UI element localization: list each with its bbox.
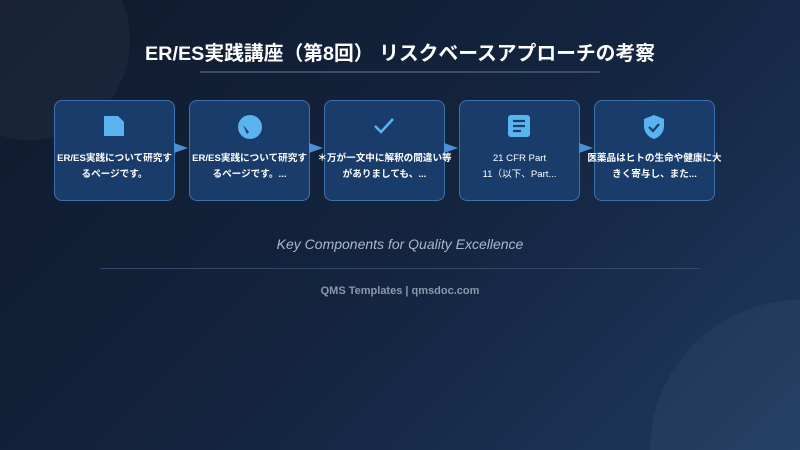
arrow 4 — [579, 143, 593, 153]
card 4 — [459, 100, 580, 201]
arrow 2 — [309, 143, 323, 153]
card 5: 医薬品はヒトの生命や健康に大 — [587, 153, 722, 164]
icon: shield — [644, 115, 664, 139]
card 1: るページです。 — [81, 169, 148, 180]
card 3: ＊万が一文中に解釈の間違い等 — [317, 153, 452, 164]
card 2: るページです。... — [212, 169, 286, 180]
icon: document — [104, 116, 124, 136]
card 1: ER/ES実践について研究す — [57, 153, 172, 164]
card 4: 21 CFR Part — [493, 153, 546, 164]
arrow 1 — [174, 143, 188, 153]
card 3 — [324, 100, 445, 201]
card 1 — [54, 100, 175, 201]
title: ER/ES実践講座（第8回） リスクベースアプローチの考察 — [145, 43, 655, 65]
icon: globe — [238, 115, 262, 139]
card 5 — [594, 100, 715, 201]
icon: list — [508, 115, 530, 137]
card 5: きく寄与し、また... — [612, 169, 697, 180]
card 3: がありましても、... — [343, 169, 426, 180]
card 2 — [189, 100, 310, 201]
card 2: ER/ES実践について研究す — [192, 153, 307, 164]
card 4: 11（以下、Part... — [483, 169, 556, 180]
footer: QMS Templates | qmsdoc.com — [321, 285, 479, 297]
icon: check — [374, 118, 394, 134]
arrow 3 — [444, 143, 458, 153]
subtitle: Key Components for Quality Excellence — [277, 236, 523, 252]
